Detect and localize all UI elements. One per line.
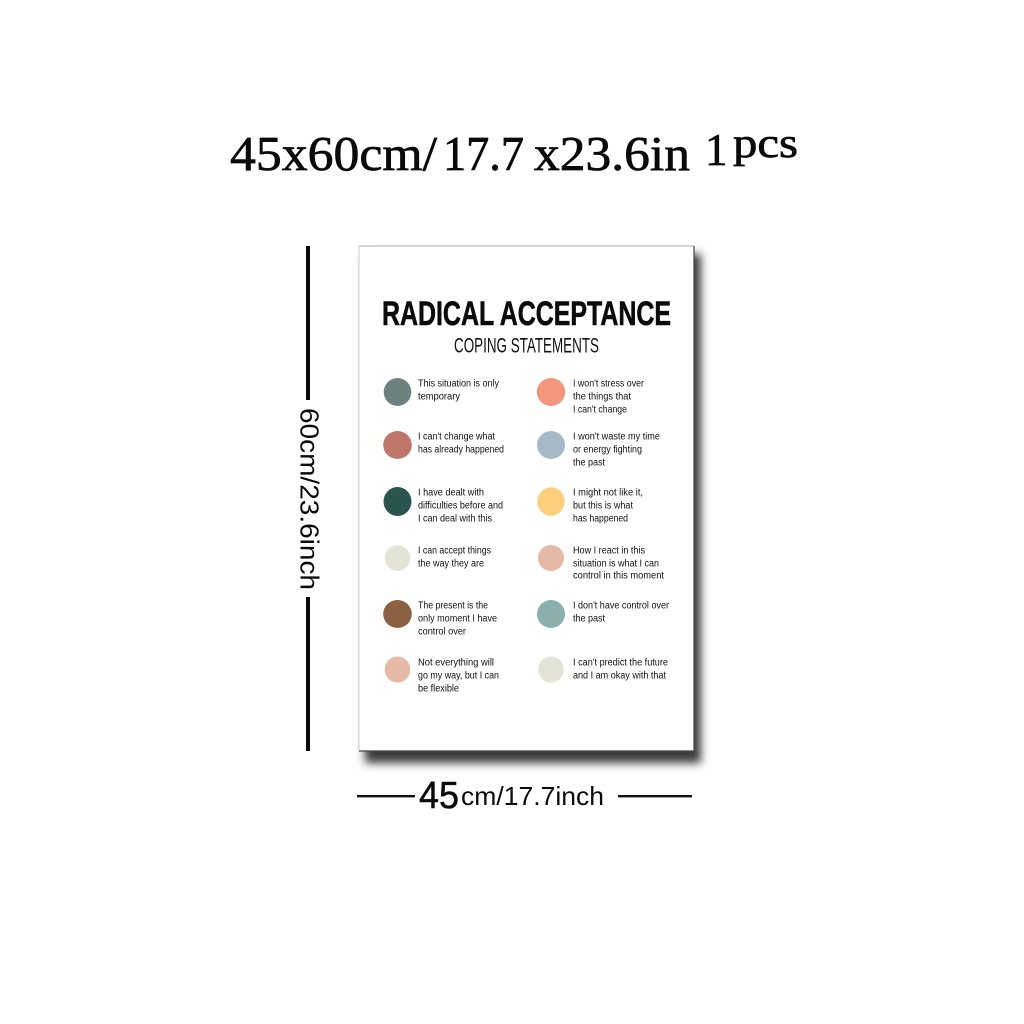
statement: can't predict future: I can't predict the future [573,658,668,668]
height dimension marker [294,246,324,751]
height dimension marker: 60cm/23.6inch [294,408,324,590]
statement: might not like it: has happened [573,514,628,524]
statement: dealt with difficulties: I have dealt with [418,488,484,498]
poster subtitle: COPING STATEMENTS [454,334,599,358]
statement: dealt with difficulties [384,487,503,524]
statement: how I react: situation is what I can [573,558,659,570]
statement: no control over past: the past [573,614,605,624]
headline: size and quantity: x23.6in [534,126,690,181]
statement: dealt with difficulties: difficulties before and [418,500,503,512]
statement: accept things: the way they are [418,558,484,570]
headline: size and quantity: 17.7 [443,126,524,181]
statement: won't stress [537,378,645,416]
statement: can't change [383,431,504,459]
statement: how I react [538,545,664,582]
statement: won't waste energy: the past [573,458,605,468]
headline: size and quantity [230,121,798,181]
statement: situation temporary: This situation is only [418,378,499,390]
statement: dealt with difficulties: I can deal with this [418,514,492,524]
statement: accept things: I can accept things [418,546,491,556]
statement: be flexible: go my way, but I can [418,670,499,682]
statement: how I react: control in this moment [573,570,664,582]
statement: no control over past: I don't have control over [573,600,670,612]
width dimension marker [357,775,692,817]
statement: can't predict future [538,656,668,682]
statement: present moment: control over [418,626,467,638]
statement: can't change: has already happened [418,444,504,456]
statement: present moment: The present is the [418,600,488,612]
statement: present moment: only moment I have [418,614,497,624]
headline: size and quantity: 1 [705,125,728,175]
statement: present moment [383,600,497,638]
statement: won't stress: I can't change [573,404,627,416]
statement: be flexible: be flexible [418,684,459,694]
statement: can't change: I can't change what [418,432,495,442]
headline: size and quantity: pcs [733,121,798,167]
statement: won't stress: the things that [573,392,631,402]
statement: accept things [385,545,491,571]
poster [359,246,694,751]
statement: might not like it: but this is what [573,500,633,512]
headline: size and quantity: 45x60cm/ [230,126,437,181]
statement: be flexible: Not everything will [418,658,494,668]
statement: won't waste energy: or energy fighting [573,444,642,456]
width dimension marker: 45 [419,775,459,817]
statement: can't predict future: and I am okay with that [573,670,666,682]
statement: how I react: How I react in this [573,546,645,556]
statement: won't stress: I won't stress over [573,378,645,390]
statement: might not like it: I might not like it, [573,488,643,498]
statement: no control over past [537,600,670,628]
poster title: RADICAL ACCEPTANCE [382,295,671,333]
statement: won't waste energy: I won't waste my time [573,432,660,442]
statement: situation temporary [384,378,499,406]
width dimension marker: cm/17.7inch [461,781,604,811]
statement: might not like it [537,487,643,524]
statement: be flexible [385,656,499,694]
poster shadow [365,254,701,763]
statement: won't waste energy [537,431,660,468]
statement: situation temporary: temporary [418,392,460,402]
